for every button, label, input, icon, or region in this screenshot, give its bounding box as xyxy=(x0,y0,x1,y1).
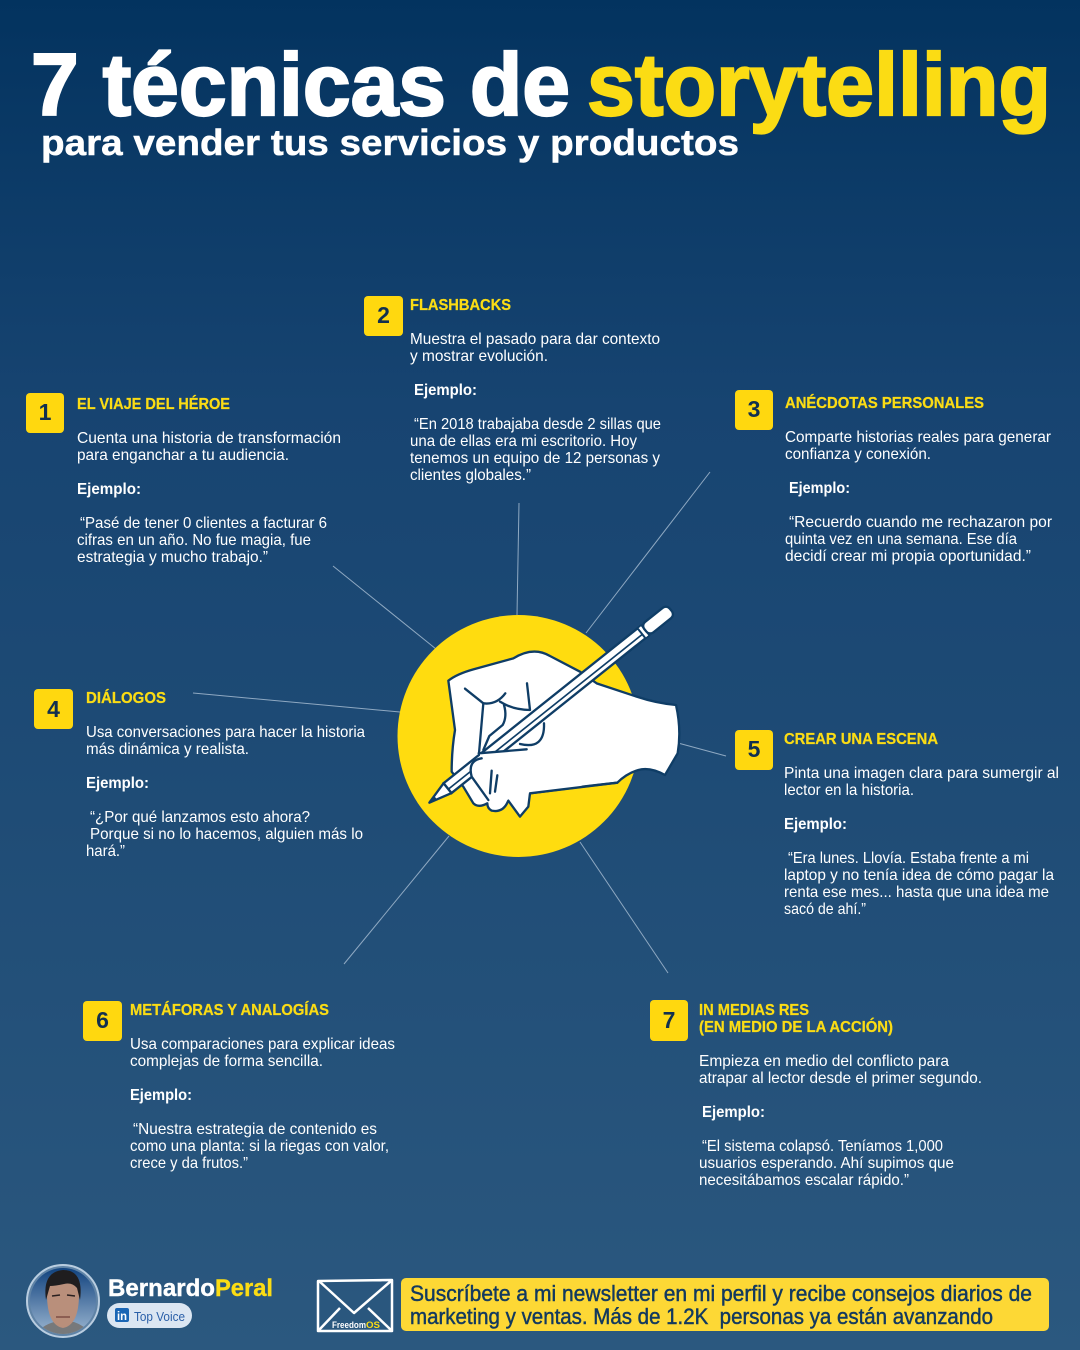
example 3: Ejemplo: xyxy=(789,480,850,497)
example 7: “El sistema colapsó. Teníamos 1,000 xyxy=(702,1138,943,1155)
example 5: sacó de ahí.” xyxy=(784,901,866,918)
description 7 xyxy=(699,1053,982,1087)
newsletter call to action banner: marketing y ventas. Más de 1.2K personas ya están avanzando xyxy=(410,1304,993,1329)
example 6: “Nuestra estrategia de contenido es xyxy=(133,1121,377,1138)
footer author name xyxy=(108,1275,273,1302)
example 4: Ejemplo: xyxy=(86,775,149,792)
icon: envelope: Freedom xyxy=(332,1320,366,1331)
example 4: “¿Por qué lanzamos esto ahora? xyxy=(90,809,310,826)
panel: 5 crear una escena xyxy=(735,730,1059,918)
number badge 2 xyxy=(364,296,403,336)
heading 7: IN MEDIAS RES xyxy=(699,1002,809,1019)
example 5: Ejemplo: xyxy=(784,816,847,833)
title: 7 técnicas de xyxy=(31,35,570,134)
icon: envelope xyxy=(318,1280,392,1331)
example 5: renta ese mes... hasta que una idea me xyxy=(784,884,1049,901)
description 4 xyxy=(86,724,365,758)
panel: 2 flashbacks xyxy=(364,296,661,484)
description 2 xyxy=(410,331,660,365)
description 5 xyxy=(784,765,1059,799)
example 4 xyxy=(86,775,363,860)
number badge 3: 3 xyxy=(748,396,760,422)
central icon: hand writing with pencil on yellow circle xyxy=(398,605,679,857)
example 5: “Era lunes. Llovía. Estaba frente a mi xyxy=(788,850,1029,867)
heading 1: EL VIAJE DEL HÉROE xyxy=(77,394,230,413)
top voice badge xyxy=(107,1303,192,1328)
example 1: cifras en un año. No fue magia, fue xyxy=(77,532,311,549)
description 7: atrapar al lector desde el primer segundo. xyxy=(699,1070,982,1087)
description 4: Usa conversaciones para hacer la historia xyxy=(86,724,365,741)
example 7: necesitábamos escalar rápido.” xyxy=(699,1172,909,1189)
footer author avatar xyxy=(27,1265,99,1337)
description 6: Usa comparaciones para explicar ideas xyxy=(130,1036,395,1053)
heading 6: METÁFORAS Y ANALOGÍAS xyxy=(130,1000,329,1019)
description 6 xyxy=(130,1036,395,1070)
description 2: Muestra el pasado para dar contexto xyxy=(410,331,660,348)
heading 7 xyxy=(699,1002,893,1036)
subtitle: para vender tus servicios y productos xyxy=(41,122,739,163)
number badge 5: 5 xyxy=(748,736,761,762)
number badge 1 xyxy=(26,393,64,433)
heading 2: FLASHBACKS xyxy=(410,297,511,314)
example 7: Ejemplo: xyxy=(702,1104,765,1121)
description 1 xyxy=(77,430,341,464)
footer author name: Bernardo xyxy=(108,1275,215,1302)
number badge 7: 7 xyxy=(663,1007,675,1033)
title xyxy=(31,35,1051,134)
example 2 xyxy=(410,382,661,484)
title: storytelling xyxy=(587,35,1051,134)
description 3 xyxy=(785,429,1052,463)
number badge 3 xyxy=(735,390,773,430)
number badge 6: 6 xyxy=(96,1007,109,1033)
heading 5: CREAR UNA ESCENA xyxy=(784,731,938,748)
panel: 6 metáforas y analogías xyxy=(83,1000,395,1172)
newsletter call to action banner: Suscríbete a mi newsletter en mi perfil y recibe consejos diarios de xyxy=(410,1281,1032,1306)
newsletter call to action banner xyxy=(401,1278,1049,1331)
description 6: complejas de forma sencilla. xyxy=(130,1053,323,1070)
example 3 xyxy=(785,480,1053,565)
example 4: Porque si no lo hacemos, alguien más lo xyxy=(90,826,363,843)
description 4: más dinámica y realista. xyxy=(86,741,249,758)
example 2: “En 2018 trabajaba desde 2 sillas que xyxy=(414,416,661,433)
number badge 4: 4 xyxy=(47,696,60,722)
example 2: una de ellas era mi escritorio. Hoy xyxy=(410,433,637,450)
example 5: laptop y no tenía idea de cómo pagar la xyxy=(784,867,1054,884)
example 3: “Recuerdo cuando me rechazaron por xyxy=(789,514,1053,531)
example 1 xyxy=(77,481,327,566)
example 2: clientes globales.” xyxy=(410,467,531,484)
top voice badge: in xyxy=(117,1309,127,1323)
heading 4: DIÁLOGOS xyxy=(86,688,166,707)
example 1: Ejemplo: xyxy=(77,481,141,498)
example 2: tenemos un equipo de 12 personas y xyxy=(410,450,660,467)
description 5: Pinta una imagen clara para sumergir al xyxy=(784,765,1059,782)
panel: 3 anécdotas personales xyxy=(735,390,1053,565)
example 1: “Pasé de tener 0 clientes a facturar 6 xyxy=(80,515,327,532)
description 3: Comparte historias reales para generar xyxy=(785,429,1052,446)
example 5 xyxy=(784,816,1054,918)
description 2: y mostrar evolución. xyxy=(410,348,548,365)
number badge 1: 1 xyxy=(39,399,52,425)
number badge 6 xyxy=(83,1001,122,1041)
description 5: lector en la historia. xyxy=(784,782,914,799)
description 3: confianza y conexión. xyxy=(785,446,931,463)
number badge 4 xyxy=(34,689,73,729)
example 6: crece y da frutos.” xyxy=(130,1155,248,1172)
number badge 7 xyxy=(650,1000,688,1041)
example 3: decidí crear mi propia oportunidad.” xyxy=(785,548,1031,565)
example 6 xyxy=(130,1087,389,1172)
example 7: usuarios esperando. Ahí supimos que xyxy=(699,1155,954,1172)
footer author name: Peral xyxy=(215,1275,273,1302)
description 1: para enganchar a tu audiencia. xyxy=(77,447,289,464)
heading 7: (EN MEDIO DE LA ACCIÓN) xyxy=(699,1017,893,1036)
example 4: hará.” xyxy=(86,843,125,860)
number badge 5 xyxy=(735,730,773,770)
number badge 2: 2 xyxy=(377,302,390,328)
top voice badge: Top Voice xyxy=(134,1309,185,1324)
heading 3: ANÉCDOTAS PERSONALES xyxy=(785,393,984,412)
example 3: quinta vez en una semana. Ese día xyxy=(785,531,1017,548)
example 6: como una planta: si la riegas con valor, xyxy=(130,1138,389,1155)
description 7: Empieza en medio del conflicto para xyxy=(699,1053,949,1070)
description 1: Cuenta una historia de transformación xyxy=(77,430,341,447)
icon: envelope: OS xyxy=(366,1320,380,1331)
example 1: estrategia y mucho trabajo.” xyxy=(77,549,268,566)
panel: 4 diálogos xyxy=(34,688,365,860)
example 7 xyxy=(699,1104,954,1189)
example 2: Ejemplo: xyxy=(414,382,477,399)
panel: 7 in medias res xyxy=(650,1000,982,1189)
example 6: Ejemplo: xyxy=(130,1087,192,1104)
panel: 1 el viaje del héroe xyxy=(26,393,341,566)
connector lines xyxy=(193,472,726,973)
